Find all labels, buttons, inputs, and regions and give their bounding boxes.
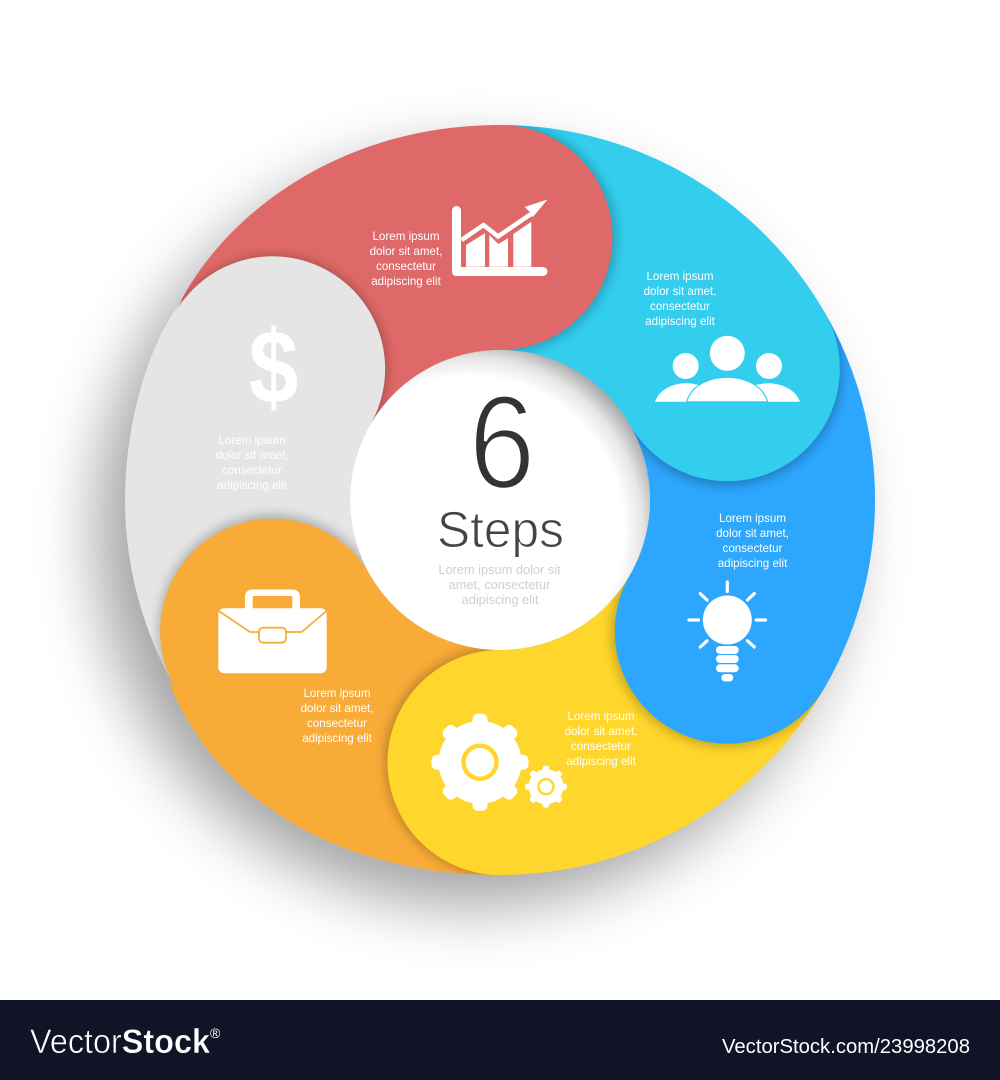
footer url: VectorStock.com/23998208 [722,1036,970,1058]
text: center caption [438,562,561,607]
panel: center circle [350,350,650,650]
footer bar [0,1000,1000,1080]
text: gray step [216,434,288,492]
heading: Steps: Steps [437,501,564,558]
text: cyan step: consectetur [650,300,710,313]
text: orange step: Lorem ipsum [303,687,371,700]
text: center caption: adipiscing elit [462,592,539,607]
text: blue step: adipiscing elit [718,557,788,570]
heading: number 6: 6 [469,367,535,516]
text: orange step [301,687,373,745]
text: yellow step: dolor sit amet, [565,725,637,738]
icon: gears [432,714,567,811]
icon: briefcase [218,590,327,673]
panel: red step tail [175,125,612,425]
panel: blue step [606,312,875,752]
text: blue step: Lorem ipsum [719,512,786,525]
text: cyan step: dolor sit amet, [644,285,716,298]
text: red step: dolor sit amet, [370,245,442,258]
panel: red step head [370,123,616,353]
text: cyan step: Lorem ipsum [646,270,714,283]
panel: orange step [158,514,500,875]
text: orange step: consectetur [307,717,367,730]
text: blue step: consectetur [723,542,783,555]
text: yellow step: Lorem ipsum [567,710,635,723]
text: cyan step: adipiscing elit [645,315,716,328]
text: yellow step: adipiscing elit [566,755,637,768]
circle drop shadow [97,155,847,905]
panel: yellow step [384,575,825,877]
footer logo: VectorStock [30,1023,210,1061]
icon: people [655,336,800,402]
text: blue step: dolor sit amet, [716,527,789,540]
text: yellow step [565,710,637,768]
text: blue step [716,512,789,570]
text: gray step: consectetur [222,464,282,477]
text: center caption: amet, consectetur [449,577,551,592]
text: red step [370,230,442,288]
icon: light bulb [689,582,766,682]
text: orange step: adipiscing elit [302,732,373,745]
text: red step: consectetur [376,260,436,273]
text: gray step: adipiscing elit [217,479,288,492]
text: red step: Lorem ipsum [372,230,440,243]
text: orange step: dolor sit amet, [301,702,373,715]
panel: cyan step [501,125,848,491]
text: cyan step [644,270,716,328]
icon: growth chart [452,200,548,276]
text: yellow step: consectetur [571,740,631,753]
footer registered mark: ® [210,1025,221,1041]
text: center caption: Lorem ipsum dolor sit [438,562,561,577]
text: gray step: Lorem ipsum [218,434,286,447]
icon: dollar sign: $ [249,309,298,426]
text: red step: adipiscing elit [371,275,442,288]
panel: gray step [125,254,388,688]
text: gray step: dolor sit amet, [216,449,288,462]
